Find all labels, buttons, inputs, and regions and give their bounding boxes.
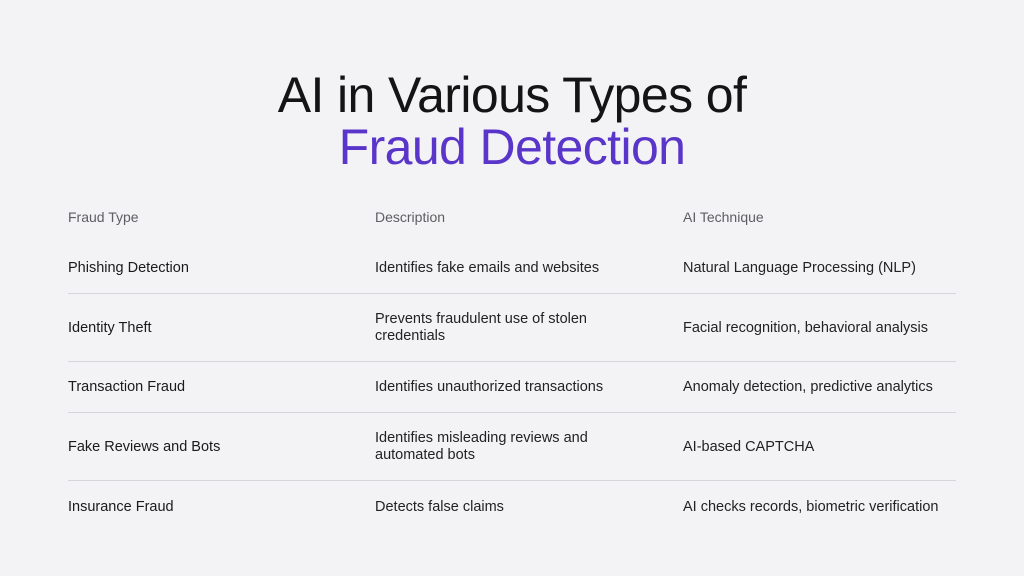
row: fake reviews: Identifies misleading reviews and: [375, 430, 588, 446]
row: fake reviews: automated bots: [375, 447, 475, 463]
row: identity theft: [68, 311, 928, 344]
row: fake reviews: AI-based CAPTCHA: [683, 439, 814, 455]
title: [278, 67, 747, 175]
row: transaction fraud: Anomaly detection, predictive analytics: [683, 379, 933, 395]
row: phishing: Phishing Detection: [68, 260, 189, 276]
header: description: Description: [375, 209, 445, 225]
row: transaction fraud: Identifies unauthorized transactions: [375, 379, 603, 395]
table: [68, 209, 938, 515]
row: fake reviews: [68, 430, 814, 463]
row: identity theft: credentials: [375, 328, 445, 344]
row: identity theft: Prevents fraudulent use of stolen: [375, 311, 587, 327]
row: identity theft: Identity Theft: [68, 320, 152, 336]
row: insurance fraud: AI checks records, biometric verification: [683, 499, 938, 515]
row: insurance fraud: [68, 499, 938, 515]
header: AI technique: AI Technique: [683, 209, 764, 225]
row: phishing: [68, 260, 916, 276]
row: phishing: Identifies fake emails and websites: [375, 260, 599, 276]
header: fraud type: Fraud Type: [68, 209, 139, 225]
row: phishing: Natural Language Processing (NLP): [683, 260, 916, 276]
title: Fraud Detection: [339, 119, 685, 175]
row: insurance fraud: Detects false claims: [375, 499, 504, 515]
row: insurance fraud: Insurance Fraud: [68, 499, 174, 515]
row: transaction fraud: Transaction Fraud: [68, 379, 185, 395]
row: identity theft: Facial recognition, behavioral analysis: [683, 320, 928, 336]
row: transaction fraud: [68, 379, 933, 395]
row: fake reviews: Fake Reviews and Bots: [68, 439, 220, 455]
title: AI in Various Types of: [278, 67, 746, 123]
